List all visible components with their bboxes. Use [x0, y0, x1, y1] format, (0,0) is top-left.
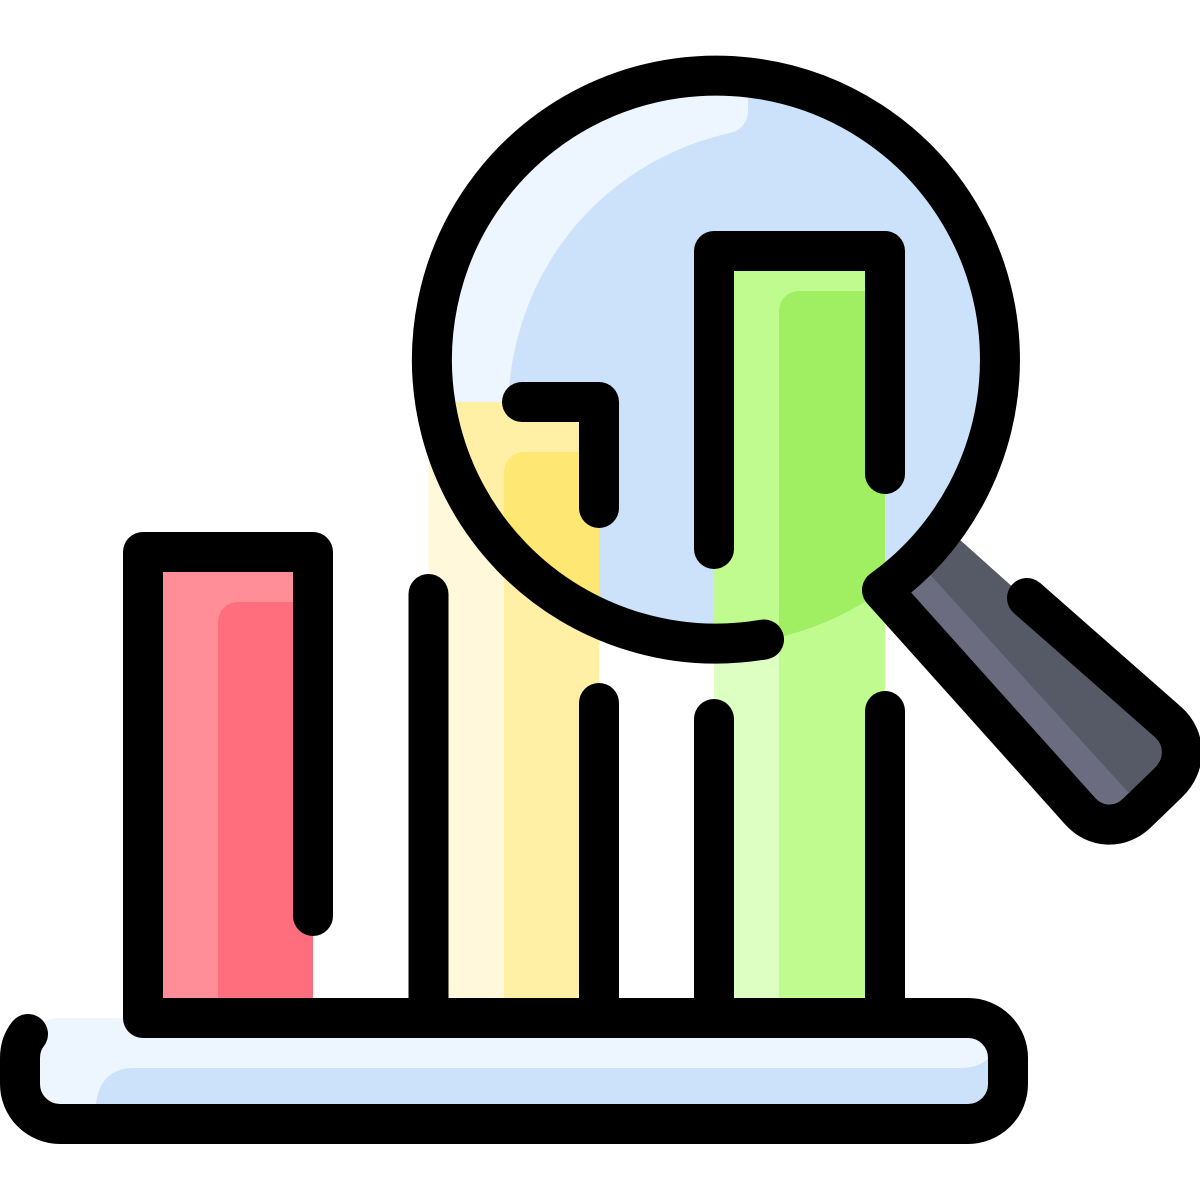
lens glass — [452, 96, 980, 636]
yellow bar right outline — [579, 703, 619, 1018]
green bar top outline — [714, 251, 885, 549]
yellow bar outline — [408, 594, 448, 1018]
green bar — [714, 251, 885, 1018]
green bar right outline — [865, 711, 905, 1018]
yellow bar top outline — [522, 402, 599, 508]
green bar left outline — [694, 719, 734, 1018]
red bar — [143, 552, 313, 1018]
magnifying glass outline — [432, 76, 1182, 825]
base platform — [20, 1018, 1008, 1124]
red bar outline — [20, 552, 1008, 1124]
handle — [882, 531, 1182, 825]
yellow bar — [428, 402, 599, 1018]
